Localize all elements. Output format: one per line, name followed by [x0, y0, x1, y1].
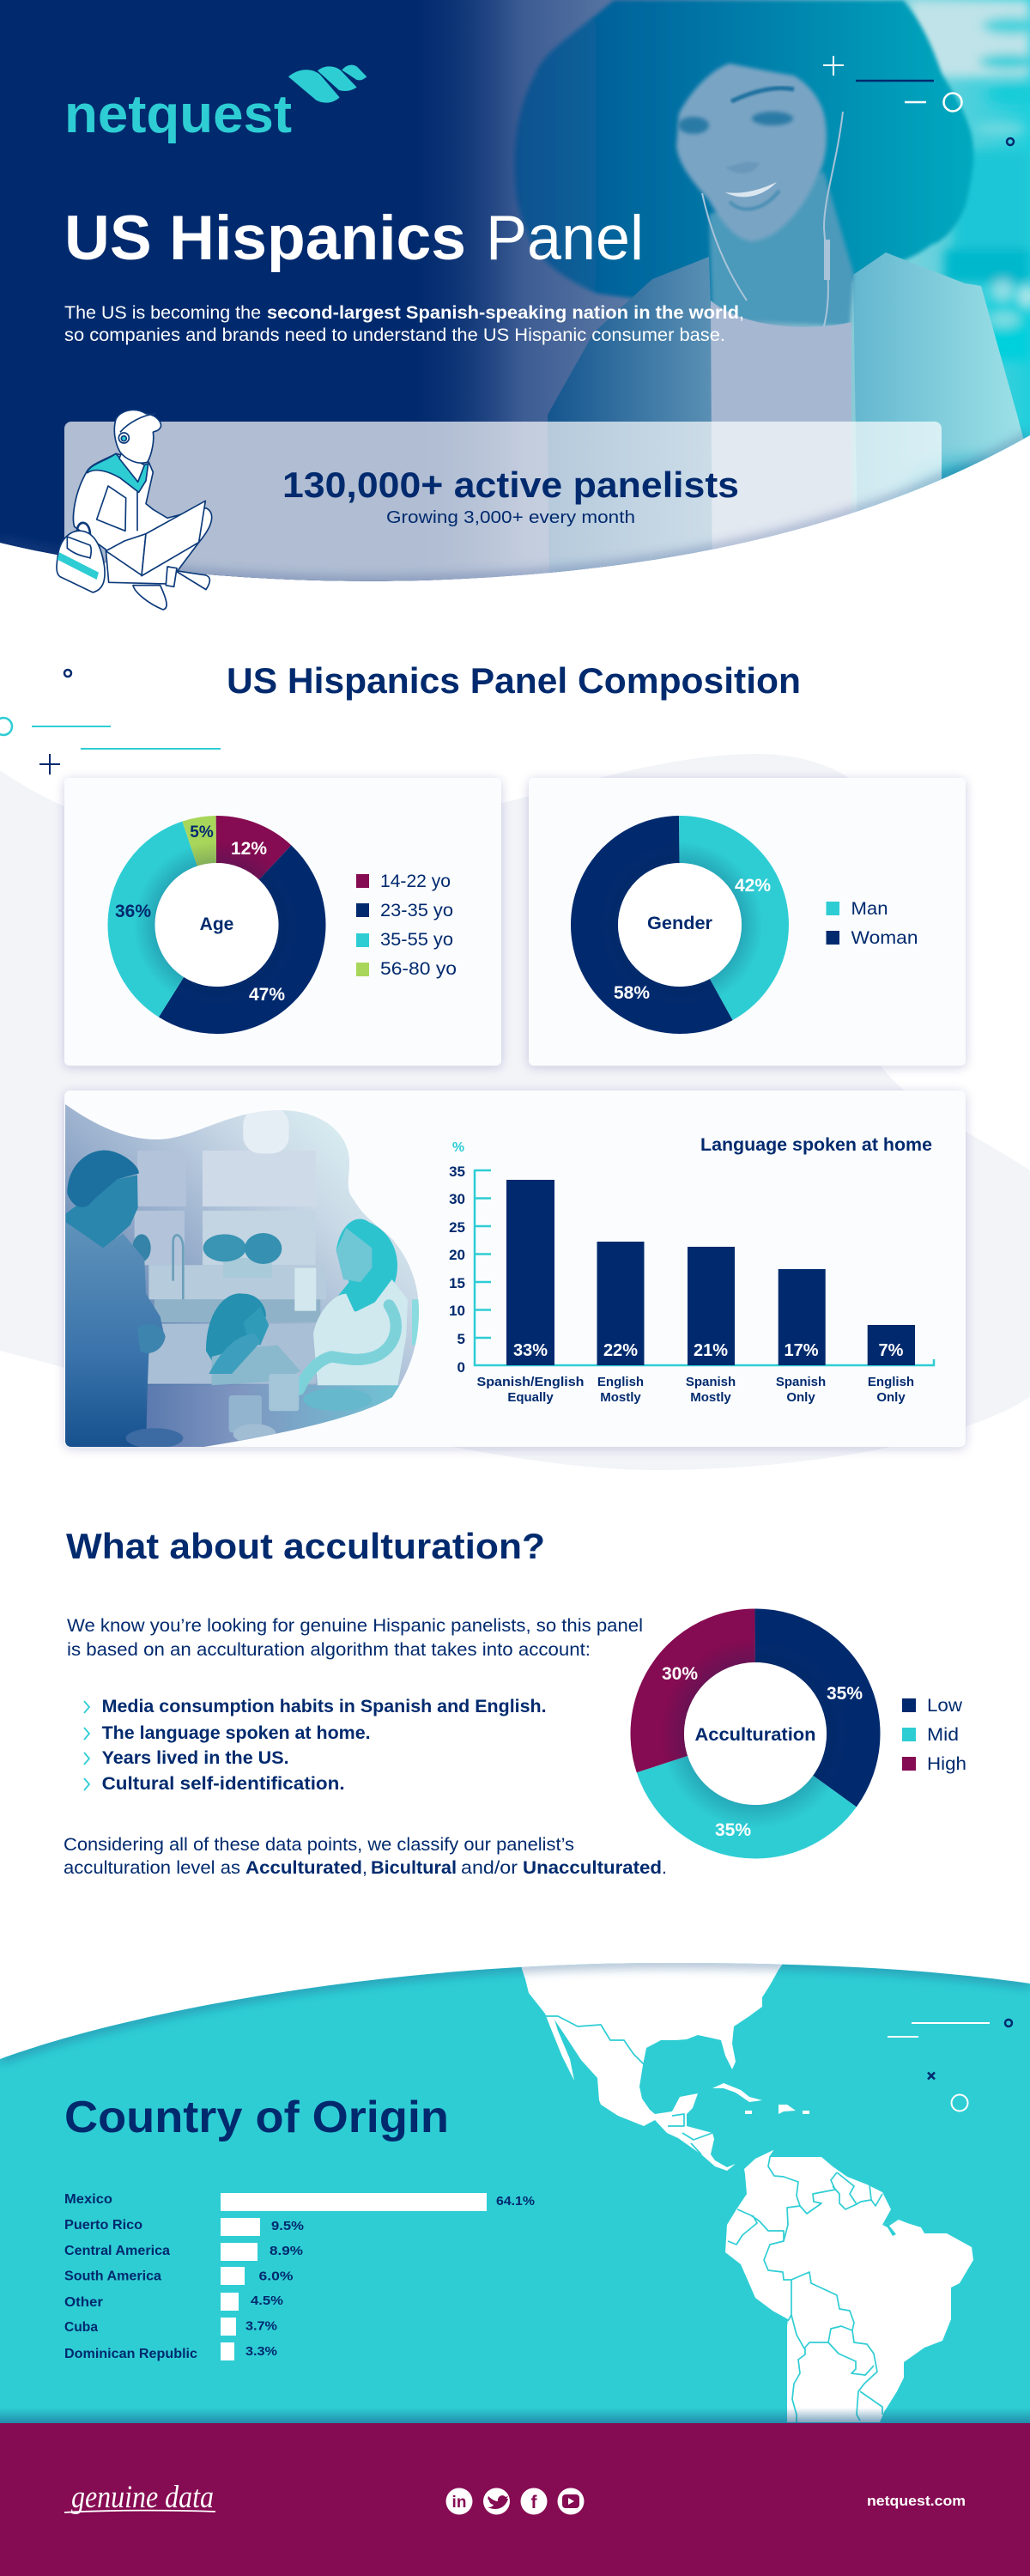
bar chart: language spoken at home: 15: [449, 1275, 465, 1291]
donut labels: age: Age: [200, 914, 233, 934]
icon: logo wings: [288, 65, 367, 103]
bar chart: country of origin: 9.5%: [271, 2220, 304, 2233]
header decorations: [823, 56, 1014, 145]
stat: active panelists: Growing 3,000+ every month: [386, 508, 635, 527]
bar chart: language spoken at home: 30: [449, 1191, 465, 1207]
footer signature: genuine data: genuine data: [71, 2480, 214, 2515]
bar chart: country of origin: 8.9%: [270, 2245, 303, 2258]
bar chart: language spoken at home: [449, 1140, 934, 1405]
bullet list: acculturation factors: Cultural self-identification.: [102, 1774, 345, 1794]
panel: gender: [529, 778, 966, 1066]
photo: woman jacket right: [853, 252, 1023, 512]
legend: age: 14-22 yo: [380, 872, 451, 891]
legend: age: [356, 872, 457, 979]
bar chart: language spoken at home: 33%: [513, 1341, 548, 1360]
legend: age: 23-35 yo: [380, 901, 453, 920]
legend: gender: [826, 899, 918, 948]
bullet list: acculturation factors: [84, 1697, 547, 1794]
bar chart: language spoken at home: 22%: [603, 1341, 638, 1360]
photo: dark teal lower right: [900, 449, 993, 496]
panel: composition background blob: [0, 754, 1030, 1470]
bar chart: country of origin: 3.7%: [245, 2320, 277, 2334]
legend: age: 35-55 yo: [380, 930, 453, 950]
social icons: f: [530, 2493, 537, 2512]
section heading: country of origin: Country of Origin: [64, 2093, 449, 2142]
donut labels: acculturation: 30%: [662, 1664, 698, 1684]
intro text: second-largest Spanish-speaking nation in the world: [267, 303, 739, 323]
bar chart: country of origin: 6.0%: [259, 2270, 294, 2284]
donut labels: acculturation: [662, 1664, 863, 1840]
social icons: [446, 2488, 584, 2514]
section heading: acculturation: What about acculturation?: [66, 1526, 545, 1566]
bar chart: language spoken at home: Spanish/English: [477, 1375, 584, 1389]
donut chart: gender: [594, 840, 766, 1010]
bar chart: country of origin: 64.1%: [496, 2195, 535, 2208]
text block: acculturation classification: Considering all of these data points, we classify our panelist’s: [64, 1835, 574, 1855]
text block: acculturation classification: [64, 1835, 667, 1878]
text block: acculturation classification: Unacculturated: [523, 1858, 662, 1878]
bar chart: country of origin: Dominican Republic: [64, 2347, 197, 2361]
donut labels: age: 47%: [249, 985, 285, 1005]
bullet list: acculturation factors: Years lived in the US.: [102, 1748, 289, 1768]
bar chart: language spoken at home: 10: [449, 1303, 465, 1319]
donut labels: gender: 42%: [735, 876, 771, 896]
photo: earphone wires: [702, 112, 843, 326]
stat: active panelists: 130,000+ active panelists: [282, 465, 739, 505]
logo: netquest: [64, 65, 367, 144]
legend: gender: Man: [851, 899, 888, 919]
donut labels: acculturation: 35%: [827, 1684, 863, 1704]
photo: woman face: [676, 64, 827, 241]
panel: header hero: [0, 0, 1030, 611]
text block: acculturation classification: ,: [362, 1858, 367, 1878]
stat box: [64, 422, 942, 581]
bullet list: acculturation factors: The language spoken at home.: [102, 1723, 371, 1743]
bar chart: country of origin: Central America: [64, 2244, 170, 2258]
intro text: so companies and brands need to understand the US Hispanic consumer base.: [64, 325, 725, 345]
bar chart: language spoken at home: Only: [786, 1390, 815, 1405]
panel: country of origin: [0, 1949, 1030, 2430]
bar chart: country of origin: South America: [64, 2269, 161, 2284]
text block: acculturation classification: and/or: [461, 1858, 518, 1878]
donut labels: gender: [614, 876, 771, 1003]
text block: acculturation intro: [67, 1616, 643, 1660]
bar chart: language spoken at home: Equally: [507, 1390, 554, 1405]
title: [64, 204, 644, 273]
photo: woman jacket left: [548, 257, 721, 601]
chart heading: language spoken at home: Language spoken at home: [700, 1135, 932, 1155]
bar chart: language spoken at home: 20: [449, 1247, 465, 1263]
bar chart: language spoken at home: Spanish: [686, 1375, 736, 1389]
donut labels: acculturation: Acculturation: [695, 1725, 815, 1745]
donut labels: age: 36%: [115, 902, 151, 921]
bar chart: country of origin: Puerto Rico: [64, 2218, 142, 2233]
country decorations: [888, 2020, 1012, 2111]
bar chart: language spoken at home: Only: [876, 1390, 906, 1405]
bar chart: country of origin: [64, 2192, 535, 2361]
intro text: ,: [739, 303, 744, 323]
logo: netquest: netquest: [64, 85, 292, 144]
bar chart: country of origin: Cuba: [64, 2320, 98, 2335]
photo: woman neck: [709, 172, 854, 326]
text block: acculturation intro: We know you’re looking for genuine Hispanic panelists, so this panel: [67, 1616, 643, 1636]
icon: person with laptop illustration: [57, 410, 212, 610]
intro text: [64, 303, 744, 345]
composition decorations: [0, 670, 221, 775]
text block: acculturation classification: acculturation level as: [64, 1858, 240, 1878]
photo: woman hair: [514, 0, 973, 309]
social icons: in: [452, 2494, 466, 2512]
text block: acculturation intro: is based on an acculturation algorithm that takes into account:: [67, 1640, 591, 1660]
title: US Hispanics: [64, 204, 466, 273]
bar chart: language spoken at home: %: [452, 1140, 464, 1155]
donut labels: gender: 58%: [614, 983, 650, 1003]
panel: age: [64, 778, 501, 1066]
donut labels: acculturation: 35%: [715, 1820, 751, 1840]
donut labels: age: 5%: [190, 823, 214, 841]
bar chart: country of origin: Mexico: [64, 2192, 112, 2207]
bar chart: country of origin: Other: [64, 2295, 103, 2310]
donut chart: acculturation: [657, 1636, 853, 1832]
bar chart: country of origin: 3.3%: [245, 2345, 277, 2359]
bar chart: language spoken at home: 17%: [784, 1341, 819, 1360]
bar chart: language spoken at home: English: [597, 1375, 644, 1389]
section heading: composition: US Hispanics Panel Composition: [227, 660, 801, 701]
legend: age: 56-80 yo: [380, 959, 457, 979]
map: Americas: [519, 1958, 973, 2423]
intro text: The US is becoming the: [64, 303, 261, 323]
bar chart: language spoken at home: 21%: [694, 1341, 728, 1360]
bar chart: language spoken at home: Mostly: [690, 1390, 731, 1405]
photo: woman shirt: [711, 301, 851, 550]
bar chart: language spoken at home: 5: [457, 1331, 465, 1347]
bar chart: language spoken at home: 35: [449, 1163, 465, 1180]
bar chart: language spoken at home: 0: [457, 1359, 465, 1376]
title: Panel: [486, 204, 644, 273]
bar chart: language spoken at home: English: [868, 1375, 914, 1389]
bar chart: language spoken at home: Mostly: [600, 1390, 641, 1405]
bar chart: country of origin: 4.5%: [251, 2294, 283, 2308]
footer website: netquest.com: [867, 2493, 966, 2509]
legend: acculturation: High: [927, 1754, 966, 1774]
legend: acculturation: [902, 1696, 966, 1774]
donut chart: age: [131, 840, 302, 1010]
legend: acculturation: Mid: [927, 1725, 959, 1745]
footer: [0, 2423, 1030, 2576]
stat: active panelists: [282, 465, 739, 527]
donut labels: gender: Gender: [647, 914, 712, 933]
bar chart: language spoken at home: 7%: [879, 1341, 904, 1360]
donut labels: age: 12%: [231, 839, 267, 859]
text block: acculturation classification: Acculturated: [245, 1858, 362, 1878]
legend: gender: Woman: [851, 928, 918, 948]
legend: acculturation: Low: [927, 1696, 963, 1716]
photo: facial features: [678, 88, 794, 210]
donut labels: age: [115, 823, 285, 1005]
bar chart: language spoken at home: Spanish: [776, 1375, 826, 1389]
text block: acculturation classification: Bicultural: [371, 1858, 457, 1878]
photo: family in the kitchen: [60, 1099, 429, 1457]
panel: language spoken at home: [60, 1091, 966, 1457]
bar chart: language spoken at home: 25: [449, 1219, 465, 1236]
bullet list: acculturation factors: Media consumption habits in Spanish and English.: [102, 1697, 547, 1716]
text block: acculturation classification: .: [662, 1858, 667, 1878]
